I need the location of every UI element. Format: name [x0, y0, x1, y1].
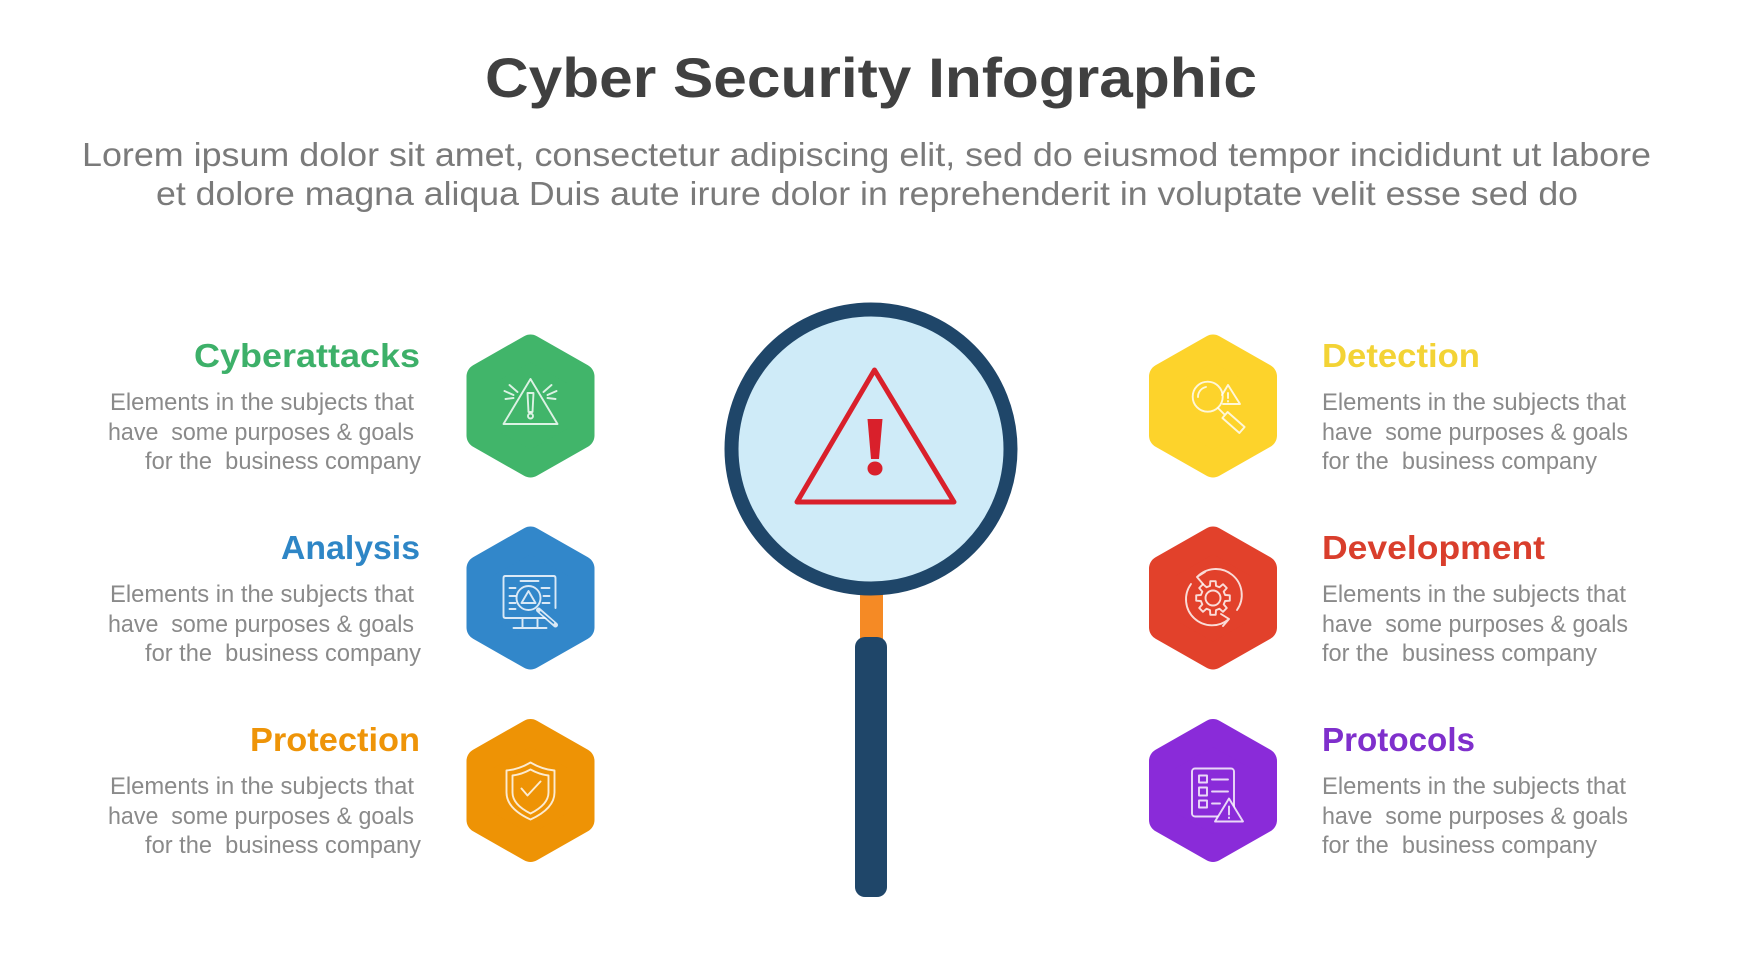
panel: protocols — [1162, 721, 1628, 859]
magnifier neck — [860, 590, 883, 642]
description: for the business company — [145, 832, 421, 859]
description — [1322, 389, 1628, 475]
description — [108, 389, 421, 475]
description: for the business company — [1322, 448, 1597, 475]
description: have some purposes & goals — [1322, 803, 1628, 830]
panel: cyberattacks — [108, 337, 582, 475]
description: Elements in the subjects that — [1322, 581, 1626, 608]
heading: Protocols — [1322, 721, 1475, 758]
description: Elements in the subjects that — [1322, 389, 1626, 416]
description: have some purposes & goals — [108, 419, 414, 446]
panel: development — [1162, 529, 1628, 667]
icon: shield check on orange hexagon — [480, 732, 582, 849]
icon: monitor with magnifier on blue hexagon — [480, 540, 582, 656]
title: Cyber Security Infographic — [485, 46, 1257, 109]
description: Elements in the subjects that — [110, 389, 414, 416]
description — [108, 581, 421, 667]
description: have some purposes & goals — [108, 611, 414, 638]
description — [1322, 581, 1628, 667]
description: for the business company — [145, 448, 421, 475]
panel: detection — [1162, 337, 1628, 475]
heading: Cyberattacks — [194, 337, 420, 374]
heading: Analysis — [281, 529, 420, 566]
panel: protection — [108, 721, 582, 859]
icon: checklist with warning on purple hexagon — [1162, 732, 1264, 849]
magnifier lens — [732, 310, 1010, 588]
subtitle: Lorem ipsum dolor sit amet, consectetur adipiscing elit, sed do eiusmod tempor incididunt ut labore — [82, 136, 1651, 173]
magnifier handle — [855, 637, 887, 897]
subtitle: et dolore magna aliqua Duis aute irure dolor in reprehenderit in voluptate velit esse sed do — [156, 175, 1578, 212]
panel: analysis — [108, 529, 582, 667]
description — [108, 773, 421, 859]
description: for the business company — [1322, 832, 1597, 859]
description — [1322, 773, 1628, 859]
subtitle — [82, 136, 1651, 212]
warning triangle — [797, 370, 954, 502]
description: Elements in the subjects that — [1322, 773, 1626, 800]
description: for the business company — [1322, 640, 1597, 667]
central magnifying glass — [732, 310, 1010, 897]
description: have some purposes & goals — [108, 803, 414, 830]
icon: warning alert on green hexagon — [480, 348, 582, 464]
icon: gear with cycle arrows on red hexagon — [1162, 540, 1264, 656]
description: Elements in the subjects that — [110, 581, 414, 608]
heading: Development — [1322, 529, 1545, 566]
description: have some purposes & goals — [1322, 611, 1628, 638]
heading: Detection — [1322, 337, 1480, 374]
heading: Protection — [250, 721, 420, 758]
description: for the business company — [145, 640, 421, 667]
description: have some purposes & goals — [1322, 419, 1628, 446]
description: Elements in the subjects that — [110, 773, 414, 800]
icon: magnifier with warning on yellow hexagon — [1162, 348, 1264, 464]
